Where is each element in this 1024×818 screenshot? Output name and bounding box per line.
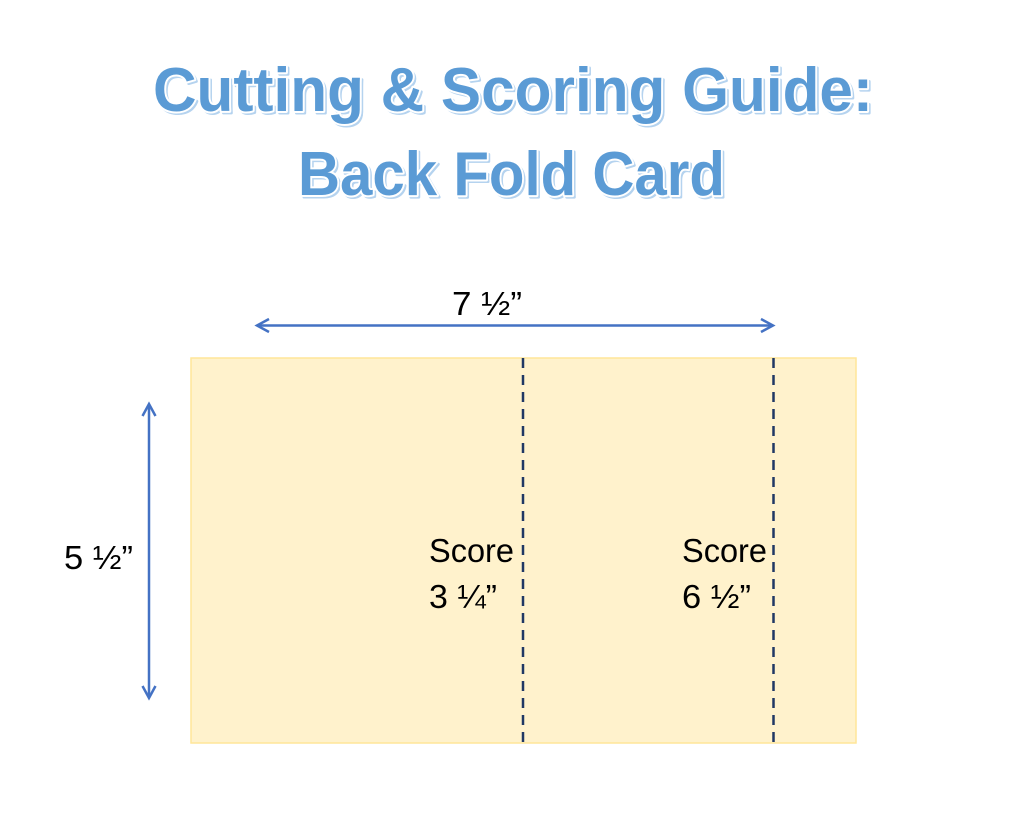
- first score label: Score: [429, 532, 514, 569]
- title: Back Fold Card: [300, 142, 727, 211]
- width label: 7 ½”: [452, 285, 522, 322]
- first score label: 3 ¼”: [429, 578, 497, 615]
- height arrow: [142, 404, 156, 698]
- title: Cutting & Scoring Guide:: [153, 56, 873, 125]
- second score label: Score: [682, 532, 767, 569]
- card panel: [191, 358, 856, 743]
- first score label: [429, 532, 514, 615]
- score line at 3 1/4 inches: [522, 358, 524, 742]
- title: Back Fold Card: [298, 140, 725, 209]
- score line at 6 1/2 inches: [772, 358, 775, 742]
- second score label: 6 ½”: [682, 578, 751, 615]
- height label: 5 ½”: [64, 539, 133, 576]
- second score label: [682, 532, 767, 615]
- title: Cutting & Scoring Guide:: [153, 56, 873, 125]
- width arrow: [257, 319, 773, 332]
- title: Back Fold Card: [298, 140, 725, 209]
- title: [153, 56, 875, 211]
- title: Cutting & Scoring Guide:: [155, 58, 875, 127]
